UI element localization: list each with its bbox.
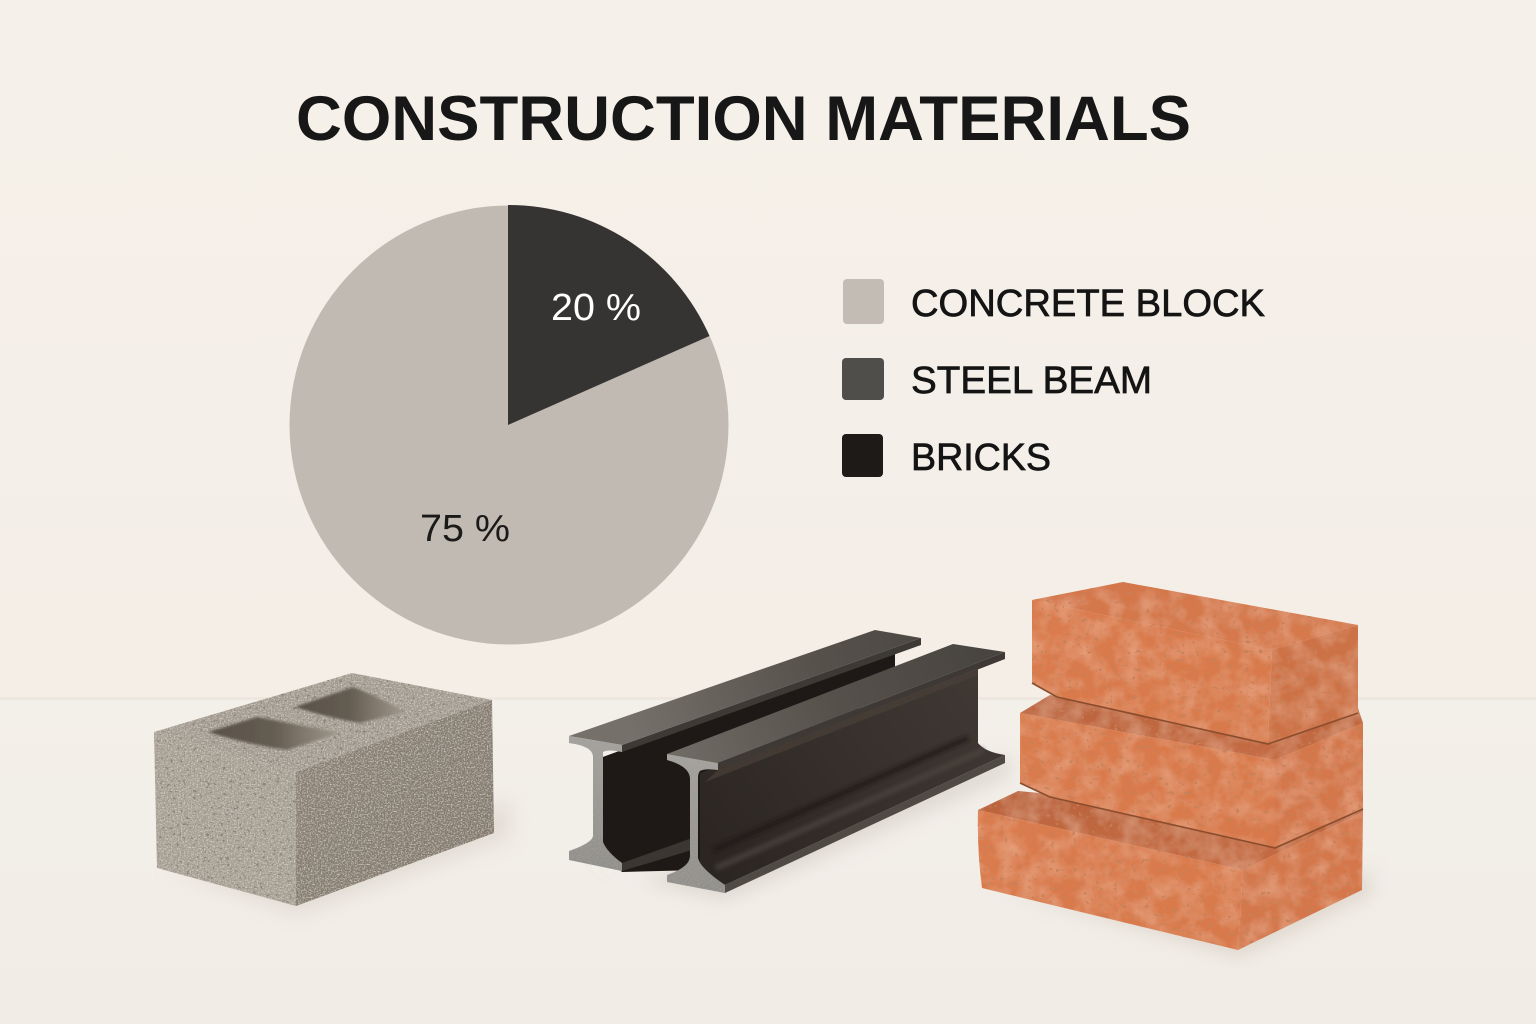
table surface [0,699,1536,1024]
back beam section [569,736,622,871]
pie slice: steel beam 20% [508,205,710,425]
brick bottom [978,791,1363,950]
legend item: steel beam: STEEL BEAM [911,360,1152,402]
front beam top flange [667,644,1005,763]
front beam web [700,668,1005,885]
legend item: bricks [842,434,1051,479]
label: 20 %: 20 % [551,287,641,329]
block side face [296,700,494,906]
legend [842,279,1265,479]
block top face [154,673,492,772]
block hole left [208,717,340,750]
front beam [667,644,1005,893]
brick top [1032,582,1358,744]
title: CONSTRUCTION MATERIALS [296,84,1191,154]
block front face [154,732,296,906]
steel beams [569,630,1010,900]
block hole right [295,687,405,723]
stack of bricks [978,582,1372,958]
background wall [0,0,1536,699]
legend item: bricks: BRICKS [911,437,1051,479]
pie slice: concrete block 75% [290,206,728,644]
pie chart [290,205,728,645]
back beam [569,630,921,872]
brick middle [1020,695,1363,848]
front beam section [667,754,725,893]
label: 75 %: 75 % [420,508,510,550]
legend item: concrete block: CONCRETE BLOCK [911,283,1265,325]
concrete block [154,673,510,915]
